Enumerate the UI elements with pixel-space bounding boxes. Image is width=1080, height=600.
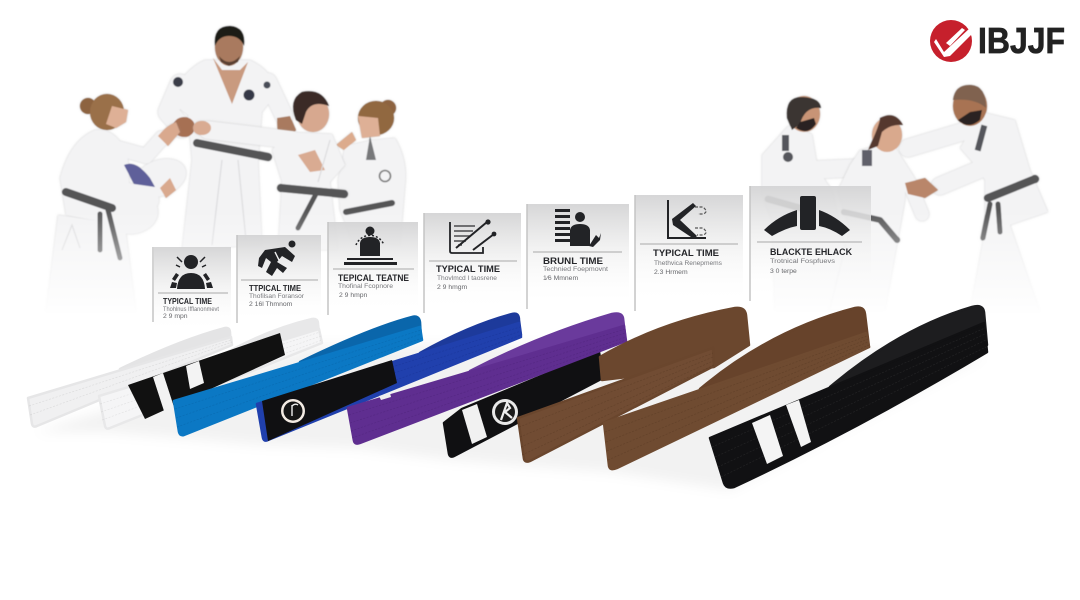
logo: IBJJF: IBJJF [978,20,1065,61]
card 1: white belt: 2 9 mpn [163,313,188,320]
person: center man [168,26,296,250]
belt: purple [348,314,626,444]
belt: brown long [604,308,869,469]
icon: figure radiating [170,255,213,289]
card 1: white belt [153,247,231,330]
icon: grappling figure [258,240,296,276]
belt: dark blue with black bar [257,314,521,441]
icon: figure on podium [344,226,397,265]
logo: IBJJF [930,20,1065,62]
card 1: white belt: Thohlnus Ifflanonmevt [163,306,219,313]
black bar with stripes [128,333,285,419]
card 4: purple-black belt [424,213,521,313]
person: bearded man [762,96,855,310]
belt: brown [518,308,749,462]
icon: technique chart [450,219,496,253]
belt shadows [35,345,985,490]
card 5: brown belt: BRUNL TIME [543,256,603,267]
white stripes [752,400,811,464]
card 6: brown-black belt: 2.3 Hrmem [654,269,688,276]
card 2: blue belt [237,235,321,323]
card 4: purple-black belt: TYPICAL TIME [436,264,500,275]
card 7: black belt: BLACKTE EHLACK [770,247,852,258]
person: middle woman [193,91,345,250]
card 3: purple belt: Thofinal Fcopnore [338,283,393,290]
person: bald man [908,85,1048,312]
card 3: purple belt: TEPICAL TEATNE [338,273,409,283]
person: ponytail woman [830,115,938,310]
card 2: blue belt: TTPICAL TIME [249,283,301,293]
card 5: brown belt: 1⁄6 Mmnem [543,275,578,282]
person: left woman [46,94,192,312]
patch logo [281,399,305,423]
card 6: brown-black belt [635,195,743,311]
card 7: black belt: Trotnical Fospfuevs [770,258,836,265]
card 2: blue belt: Thofilsan Foransor [249,293,305,300]
card 3: purple belt: 2 9 hmpn [339,292,368,299]
card 7: black belt [750,186,871,301]
black bar [262,360,397,441]
belt: white [28,328,232,427]
belt: black with white stripes [710,306,987,488]
card 6: brown-black belt: TYPICAL TIME [653,248,719,259]
card 7: black belt: 3 0 terpe [770,268,797,275]
belt: black section with white stripe [444,352,603,457]
people: right group [762,85,1048,312]
card 4: purple-black belt: Thovlmcd I taosrene [437,275,497,282]
patch logo [492,399,518,425]
icon: axis chart [668,200,706,239]
card 5: brown belt [527,204,629,309]
belt: white with black bar [99,319,322,429]
card 2: blue belt: 2 16l Thmnom [249,301,293,308]
card 1: white belt: TYPICAL TIME [163,296,212,306]
person: right woman [336,100,406,245]
card 3: purple belt [328,222,418,315]
card 5: brown belt: Technied Foepmovnt [543,266,608,273]
icon: black belt knot [764,196,850,236]
card 6: brown-black belt: Thethvica Renepmems [654,260,723,267]
people: left group [46,26,406,312]
belt: blue [174,317,422,435]
card 4: purple-black belt: 2 9 hmgm [437,284,468,291]
icon: person with stacked lines [555,209,601,247]
